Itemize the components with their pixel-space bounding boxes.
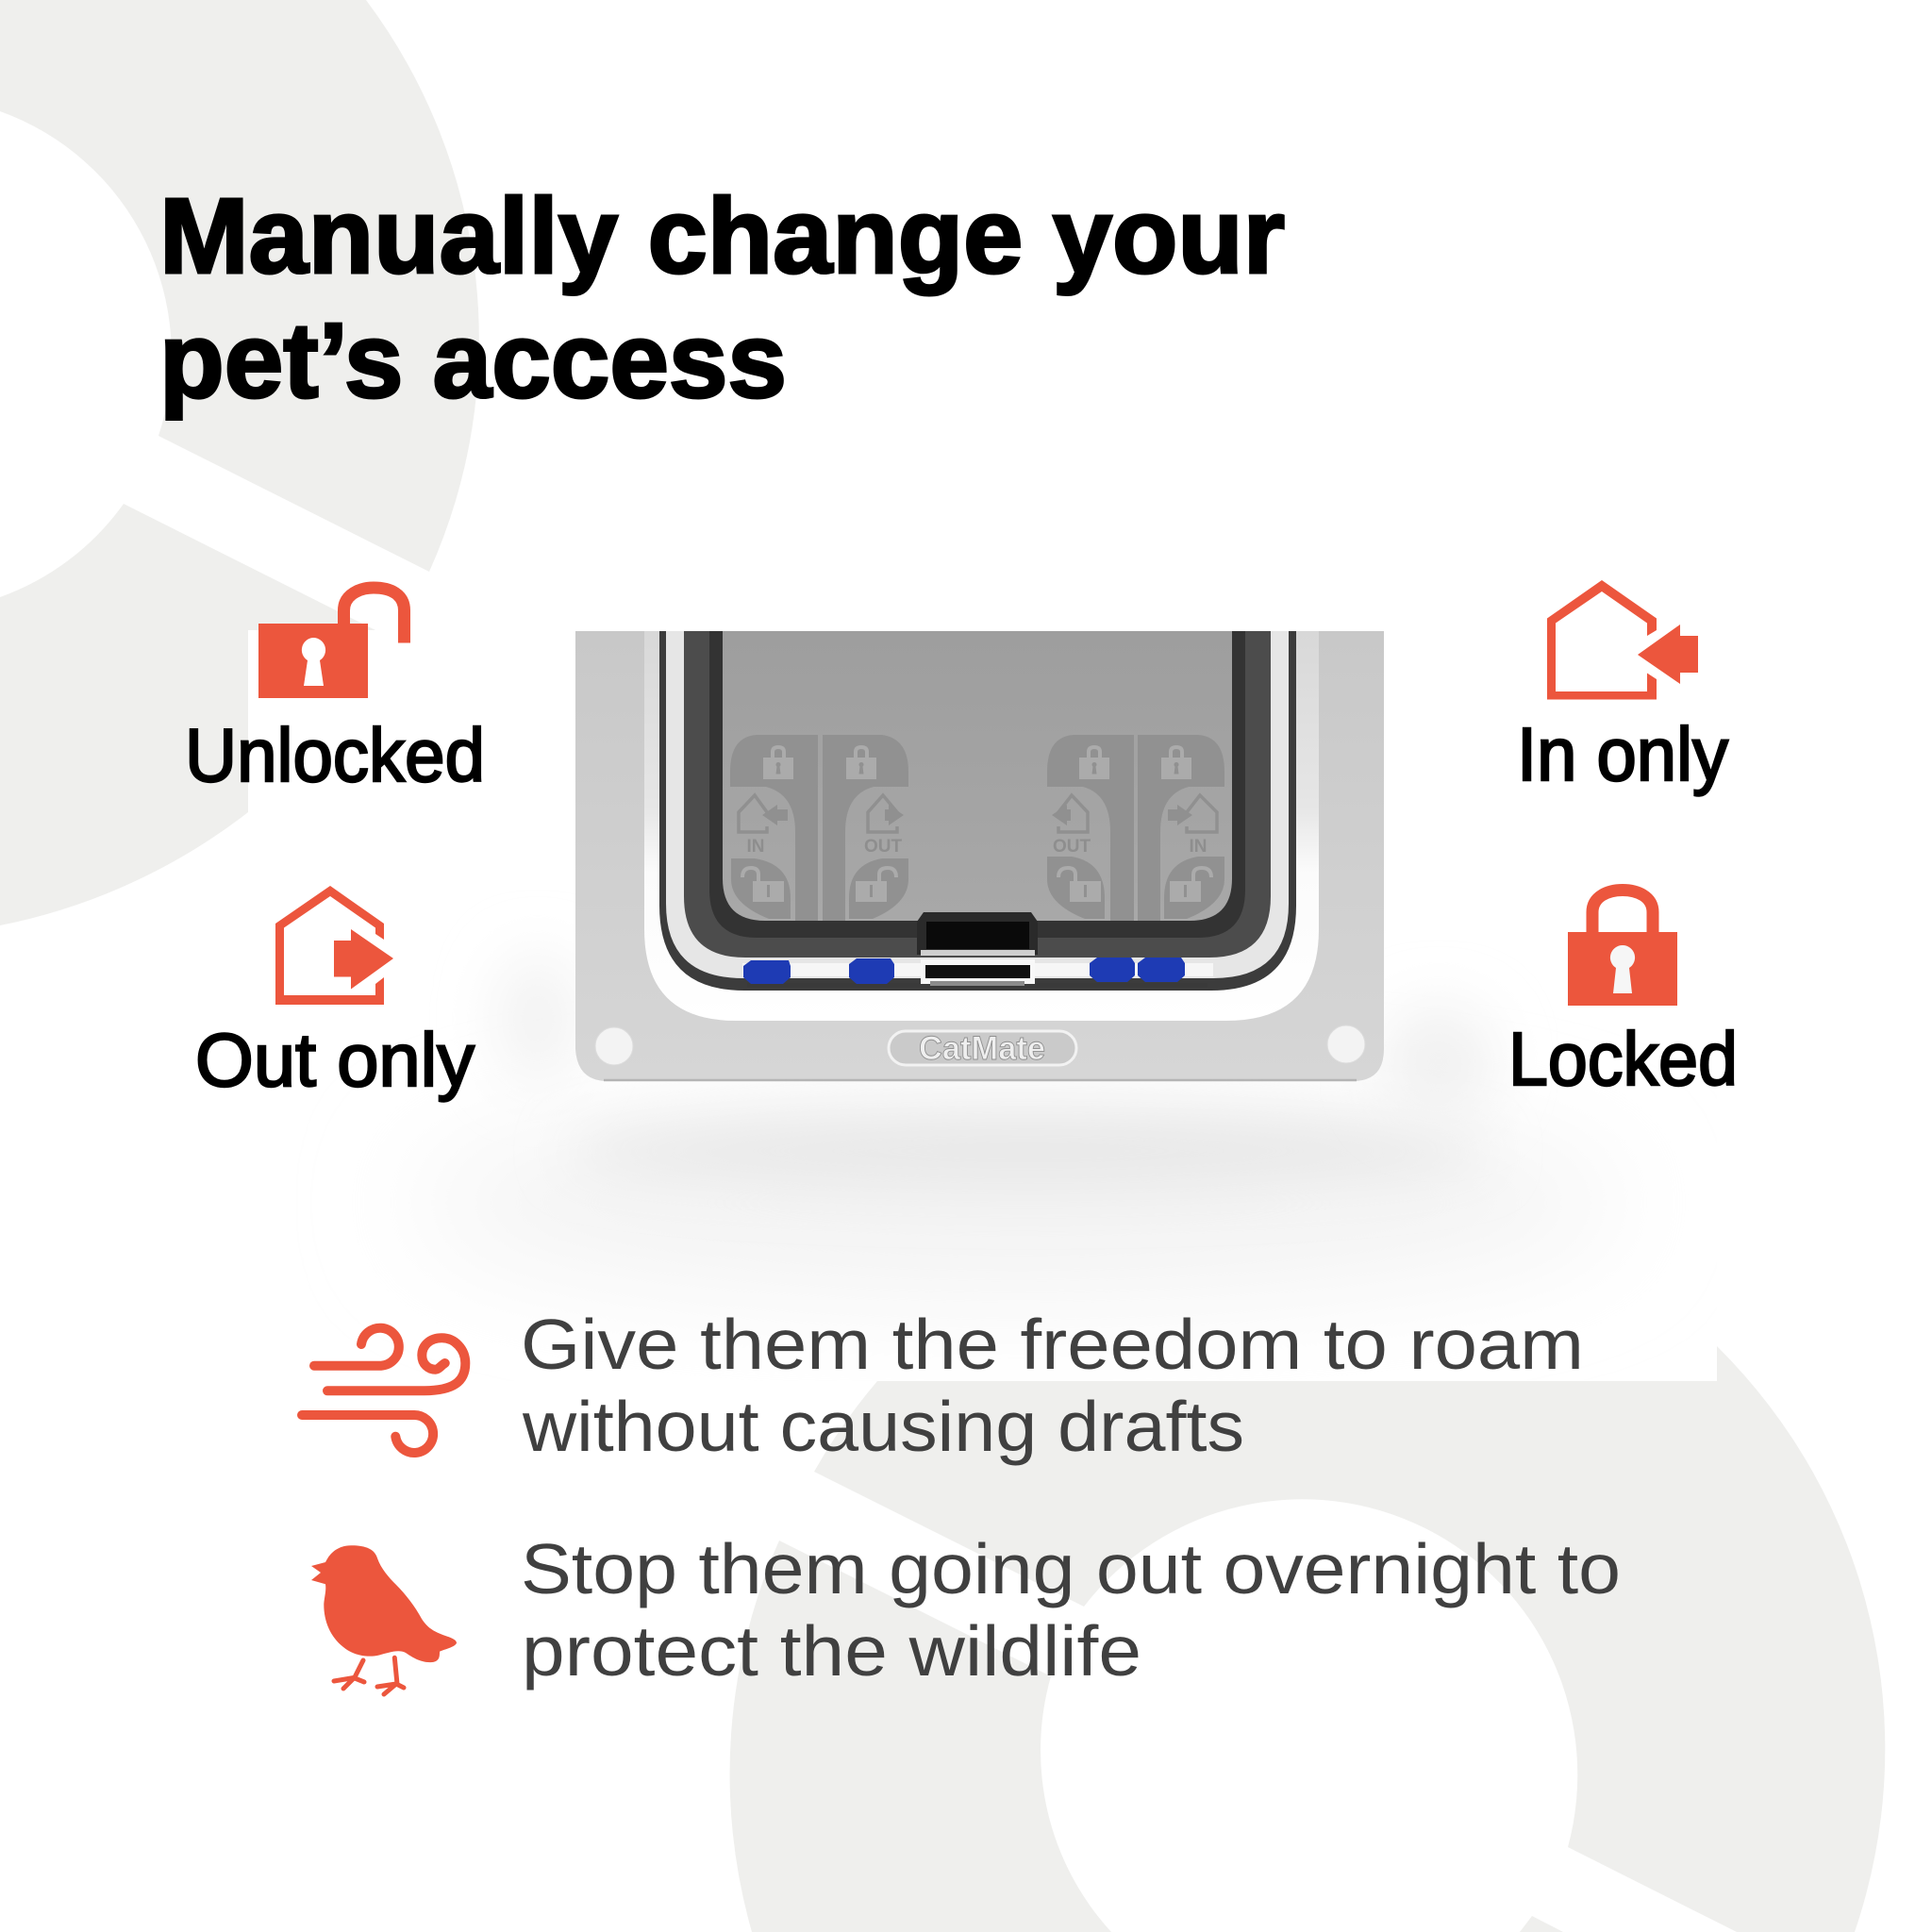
sticker: right inner <box>1047 735 1134 921</box>
text: protect the wildlife: protect the wildlife <box>522 1611 1141 1690</box>
title <box>159 176 1285 420</box>
icon: wind <box>302 1328 465 1453</box>
text: freedom to roam: Give them the freedom to roam <box>521 1305 1584 1384</box>
label: Locked: Locked <box>1508 1017 1738 1101</box>
screw cap right <box>1327 1025 1365 1063</box>
flap frame <box>709 631 1245 938</box>
sticker labels: IN <box>1189 837 1208 857</box>
white bezel <box>644 631 1319 1021</box>
screw cap left <box>595 1027 633 1065</box>
CatMate logo badge <box>889 1030 1076 1067</box>
text: freedom to roam: without causing drafts <box>522 1387 1244 1466</box>
title: Manually change your <box>159 176 1285 295</box>
flap panel <box>723 631 1232 921</box>
sticker labels: OUT <box>864 837 902 857</box>
shadow under the strip <box>747 983 1208 988</box>
icon: locked padlock <box>1568 891 1677 1006</box>
icon: house out only <box>275 886 393 1005</box>
sticker: left outer <box>730 735 818 921</box>
sticker icons: closed locks <box>763 745 1191 779</box>
blue sliders <box>743 958 1185 984</box>
icon: house in only <box>1547 580 1698 700</box>
label: Unlocked: Unlocked <box>185 713 485 797</box>
sticker labels: OUT <box>1053 837 1091 857</box>
locking clip housing <box>917 912 1038 956</box>
CatMate logo badge: CatMate <box>919 1030 1045 1067</box>
label: Out only: Out only <box>195 1018 475 1102</box>
text: protect the wildlife <box>521 1529 1621 1690</box>
outer groove <box>659 631 1296 991</box>
sticker icons: open locks <box>742 868 1211 902</box>
sticker: left inner <box>823 735 908 921</box>
slide strip <box>742 963 1213 976</box>
icon: unlocked padlock <box>258 588 404 698</box>
sticker icons: houses with arrows <box>739 795 1217 832</box>
cat flap product illustration <box>575 631 1384 1081</box>
background: top-left ring shape <box>0 0 479 925</box>
icon: bird <box>311 1545 457 1694</box>
background: bottom-right ring shape <box>730 1346 1885 1932</box>
door plate <box>575 631 1384 1081</box>
brush seal <box>684 631 1271 958</box>
sticker labels: IN <box>747 837 764 857</box>
title: pet’s access <box>159 301 787 420</box>
text: protect the wildlife: Stop them going out overnight to <box>521 1529 1621 1608</box>
white inner rim <box>666 631 1289 978</box>
soft shadow beneath the door <box>415 953 1623 1297</box>
latch window <box>921 959 1035 986</box>
label: In only: In only <box>1517 712 1728 796</box>
sticker labels <box>747 837 1208 857</box>
sticker: right outer <box>1138 735 1224 921</box>
text: freedom to roam <box>521 1305 1584 1466</box>
